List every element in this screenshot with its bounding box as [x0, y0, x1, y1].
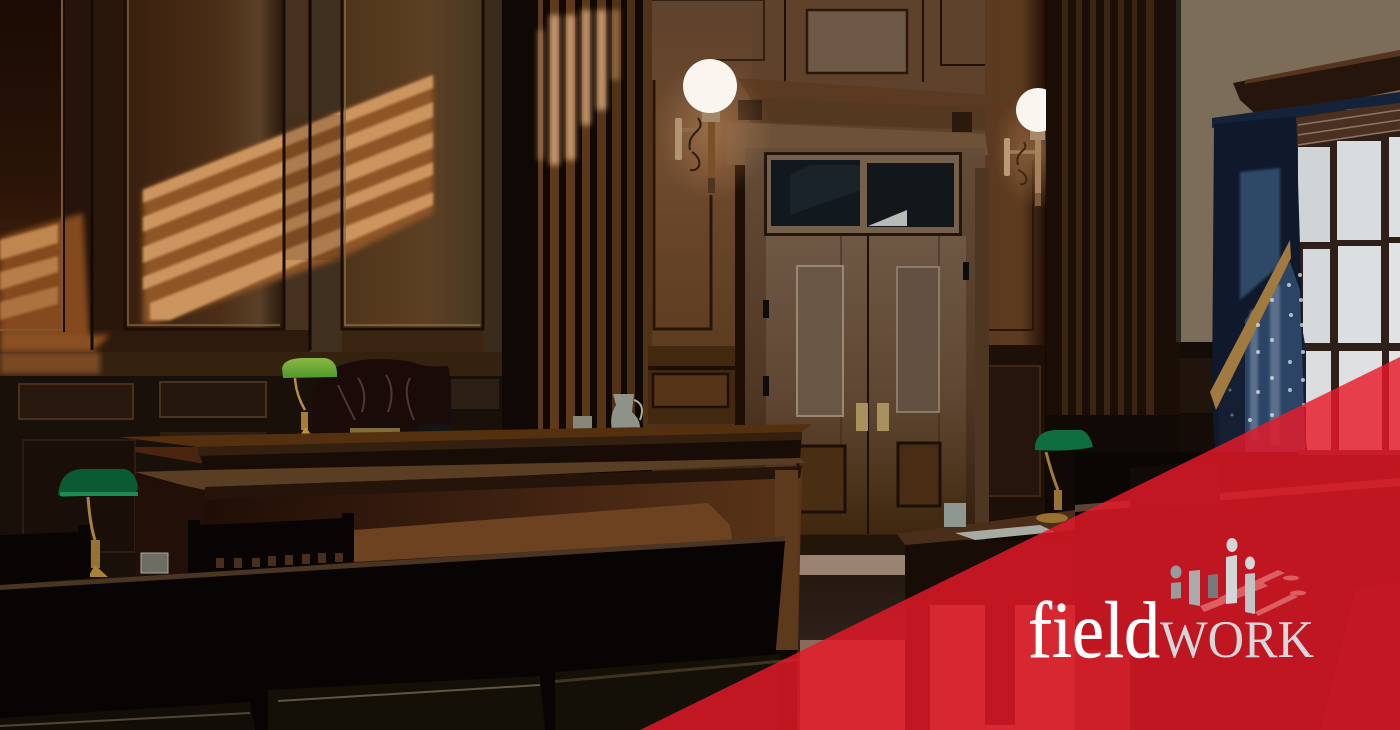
- panel: dark fluted pillar with light: [502, 0, 653, 432]
- dimming on wall strip between panels: [284, 115, 342, 260]
- front dark bench: [0, 536, 800, 730]
- logo wordmark: field: [1028, 587, 1160, 675]
- panel: right dark fluted pillar: [1046, 0, 1180, 525]
- transom window: [764, 152, 962, 236]
- judge's bench: [118, 424, 812, 650]
- panel: centre wood wall: [648, 0, 1045, 540]
- water pitcher and glass: [528, 394, 642, 433]
- sunlight stripes on left wall: [0, 75, 433, 320]
- curtain flag: [1210, 92, 1400, 470]
- icon: desk lamp left: [58, 469, 138, 577]
- sunlight patches on left wall: [0, 75, 433, 352]
- door frame and pediment: [727, 78, 992, 540]
- icon: left wall sconce: [652, 59, 772, 200]
- panel: wainscot below left wall: [0, 352, 505, 586]
- books and gavel on bench: [350, 424, 450, 439]
- logo: fieldWORK: WORK: [1160, 611, 1314, 669]
- wall panel mouldings: [0, 0, 483, 350]
- logo: fieldWORK: [1028, 538, 1314, 675]
- icon: right wall sconce: [992, 88, 1084, 210]
- right table with lamp: [800, 430, 1093, 730]
- double door: [763, 236, 969, 534]
- chairs and glass in front: [0, 513, 354, 585]
- red translucent triangle: [640, 357, 1400, 730]
- floor and furniture beneath the red corner: [1075, 450, 1400, 730]
- icon: desk lamp on bench: [282, 358, 337, 442]
- window with panes: [1295, 102, 1400, 455]
- panel: left wood wall: [0, 0, 505, 352]
- logo bar shadows: [1200, 570, 1306, 616]
- panel: right plaster wall: [1176, 0, 1400, 472]
- floor by door: [797, 535, 1097, 730]
- judge's chair: [312, 359, 451, 438]
- logo bars and dots: [1170, 538, 1255, 614]
